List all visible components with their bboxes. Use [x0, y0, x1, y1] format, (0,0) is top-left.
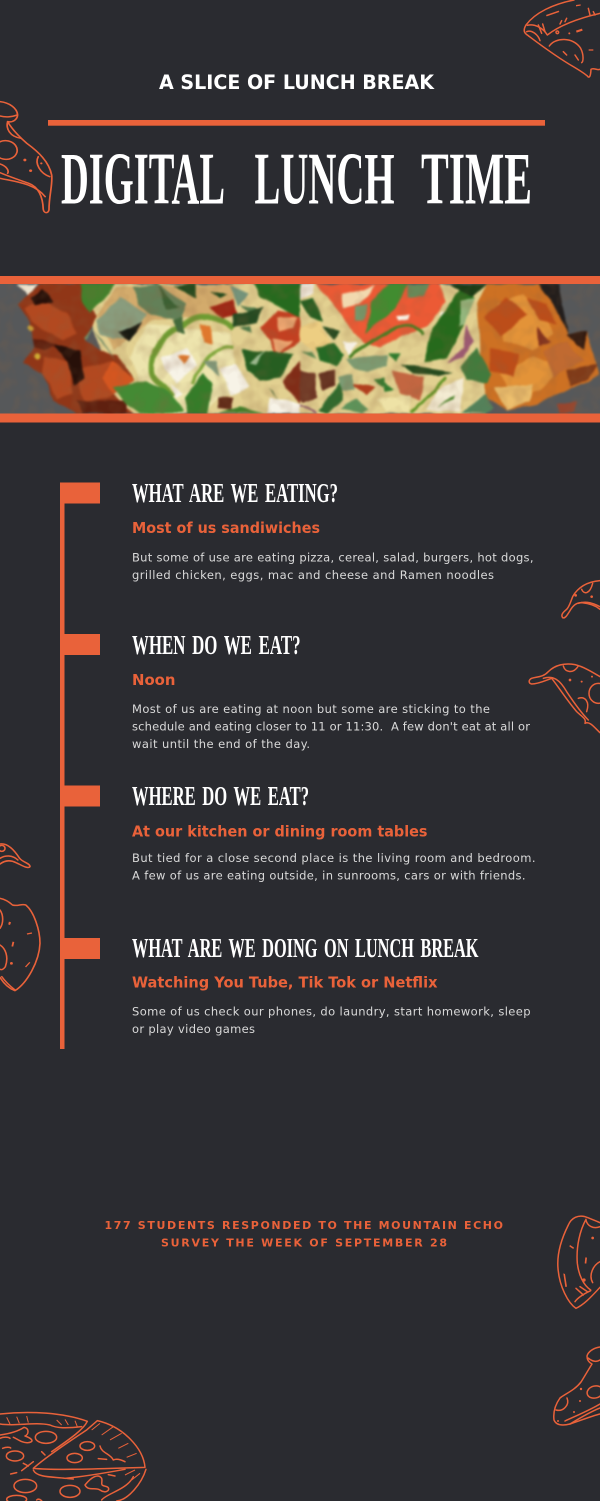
heading: WHEN DO WE EAT?	[132, 630, 300, 660]
body text: grilled chicken, eggs, mac and cheese and Ramen noodles	[132, 568, 494, 582]
heading: WHERE DO WE EAT?	[132, 781, 309, 811]
timeline marker 1	[60, 482, 100, 504]
title: LUNCH	[254, 138, 394, 220]
banner border top	[0, 276, 600, 284]
timeline marker 2	[60, 634, 100, 655]
icon: pizza slice right bottom	[554, 1347, 600, 1425]
body text	[132, 1004, 530, 1036]
body text: Some of us check our phones, do laundry, start homework, sleep	[132, 1004, 530, 1018]
left half of photo	[17, 284, 300, 414]
icon: pizza crust left	[0, 898, 40, 991]
section: what are we eating	[132, 478, 534, 582]
photo banner: pizza	[0, 284, 600, 414]
footer note: 177 STUDENTS RESPONDED TO THE MOUNTAIN ECHO	[104, 1219, 503, 1232]
icon: pizza slice left top	[0, 102, 52, 213]
icon: pizza slice right upper	[562, 581, 600, 618]
timeline marker 3	[60, 786, 100, 806]
subtitle: A SLICE OF LUNCH BREAK	[159, 71, 435, 94]
answer: Watching You Tube, Tik Tok or Netflix	[132, 974, 438, 992]
icon: whole pizza bottom left	[0, 1412, 146, 1501]
title rule	[48, 120, 545, 126]
body text: schedule and eating closer to 11 or 11:30. A few don't eat at all or	[132, 720, 530, 734]
body text: A few of us are eating outside, in sunrooms, cars or with friends.	[132, 868, 526, 882]
texture overlay	[0, 284, 600, 414]
body text: Most of us are eating at noon but some are sticking to the	[132, 702, 490, 716]
heading: WHAT ARE WE EATING?	[132, 478, 338, 508]
body text	[132, 851, 536, 882]
icon: pizza slice right lower	[529, 664, 600, 733]
body text: But some of use are eating pizza, cereal, salad, burgers, hot dogs,	[132, 550, 534, 564]
banner border bottom	[0, 414, 600, 422]
right half of photo	[300, 284, 598, 414]
section: where do we eat	[132, 781, 536, 882]
body text	[132, 702, 530, 751]
title: DIGITAL	[61, 138, 225, 220]
body text: But tied for a close second place is the living room and bedroom.	[132, 851, 536, 865]
title	[61, 138, 532, 220]
icon: pizza slice top right	[524, 0, 600, 77]
answer: At our kitchen or dining room tables	[132, 822, 428, 840]
footer note	[104, 1219, 503, 1250]
answer: Noon	[132, 671, 176, 689]
icon: pizza crust right bottom	[558, 1216, 600, 1308]
footer note: SURVEY THE WEEK OF SEPTEMBER 28	[161, 1236, 447, 1250]
answer: Most of us sandiwiches	[132, 519, 320, 537]
section: what are we doing on lunch break	[132, 933, 530, 1036]
body text: wait until the end of the day.	[132, 737, 310, 751]
timeline marker 4	[60, 938, 100, 959]
body text: or play video games	[132, 1022, 255, 1036]
section: when do we eat	[132, 630, 530, 751]
body text	[132, 550, 534, 582]
timeline	[60, 482, 100, 1049]
timeline line	[60, 482, 64, 1049]
icon: pizza slice left middle	[0, 844, 30, 867]
